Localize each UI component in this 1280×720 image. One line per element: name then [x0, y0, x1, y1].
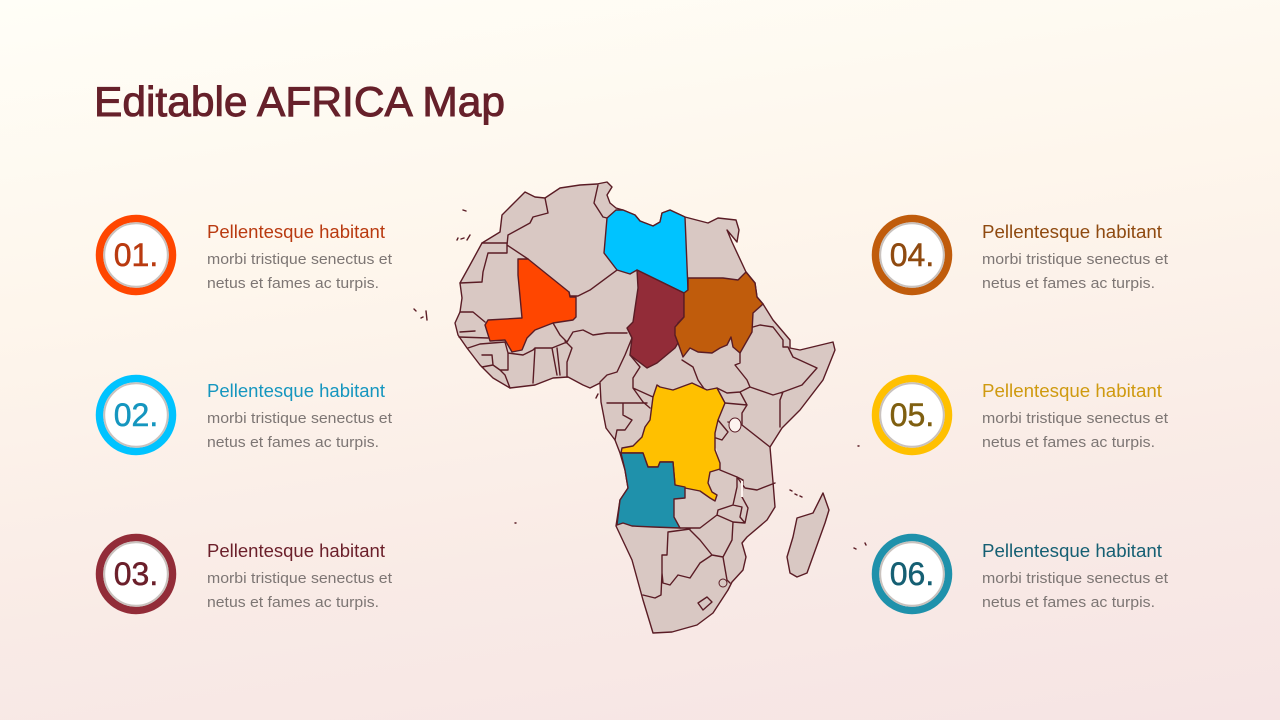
- text 01: [207, 222, 393, 292]
- badge 01: [100, 218, 172, 292]
- country borders: [459, 185, 817, 598]
- item 05: [876, 378, 1169, 452]
- badge 04: [876, 218, 948, 292]
- text 03: morbi tristique senectus et: [207, 570, 393, 587]
- text 02: Pellentesque habitant: [207, 381, 385, 401]
- text 04: [982, 222, 1169, 292]
- text 05: [982, 381, 1169, 451]
- country: Sudan: [675, 272, 763, 357]
- badge 02: [100, 378, 172, 452]
- country: Mali: [485, 259, 576, 352]
- item 06: [876, 538, 1169, 611]
- text 01: Pellentesque habitant: [207, 222, 385, 242]
- text 06: morbi tristique senectus et: [982, 570, 1169, 587]
- text 04: netus et fames ac turpis.: [982, 275, 1155, 292]
- text 06: netus et fames ac turpis.: [982, 594, 1155, 611]
- item 04: [876, 218, 1169, 292]
- country: Chad: [627, 270, 684, 368]
- text 03: [207, 541, 393, 611]
- badge 03: 03.: [114, 556, 158, 592]
- text 06: Pellentesque habitant: [982, 541, 1162, 561]
- badge 06: 06.: [890, 556, 934, 592]
- badge 03: [100, 538, 172, 610]
- text 02: [207, 381, 393, 451]
- text 04: Pellentesque habitant: [982, 222, 1162, 242]
- title: Editable AFRICA Map: [94, 78, 505, 125]
- text 05: morbi tristique senectus et: [982, 410, 1169, 427]
- country: Angola: [617, 453, 685, 528]
- Madagascar: [787, 493, 829, 577]
- item 01: [100, 218, 393, 292]
- text 01: morbi tristique senectus et: [207, 251, 393, 268]
- badge 05: [876, 378, 948, 452]
- text 04: morbi tristique senectus et: [982, 251, 1169, 268]
- text 06: [982, 541, 1169, 611]
- lakes and enclaves: [698, 418, 743, 610]
- small islands: [414, 210, 866, 549]
- text 01: netus et fames ac turpis.: [207, 275, 379, 292]
- text 03: netus et fames ac turpis.: [207, 594, 379, 611]
- country: Libya: [604, 210, 688, 293]
- badge 06: [876, 538, 948, 610]
- land silhouette: [455, 182, 835, 633]
- text 05: Pellentesque habitant: [982, 381, 1162, 401]
- text 03: Pellentesque habitant: [207, 541, 385, 561]
- badge 04: 04.: [890, 237, 934, 273]
- country: DR Congo: [621, 383, 725, 501]
- item 02: [100, 378, 393, 452]
- text 02: netus et fames ac turpis.: [207, 434, 379, 451]
- badge 01: 01.: [114, 237, 158, 273]
- text 05: netus et fames ac turpis.: [982, 434, 1155, 451]
- badge 05: 05.: [890, 397, 934, 433]
- text 02: morbi tristique senectus et: [207, 410, 393, 427]
- map of Africa: [414, 182, 866, 633]
- badge 02: 02.: [114, 397, 158, 433]
- item 03: [100, 538, 393, 611]
